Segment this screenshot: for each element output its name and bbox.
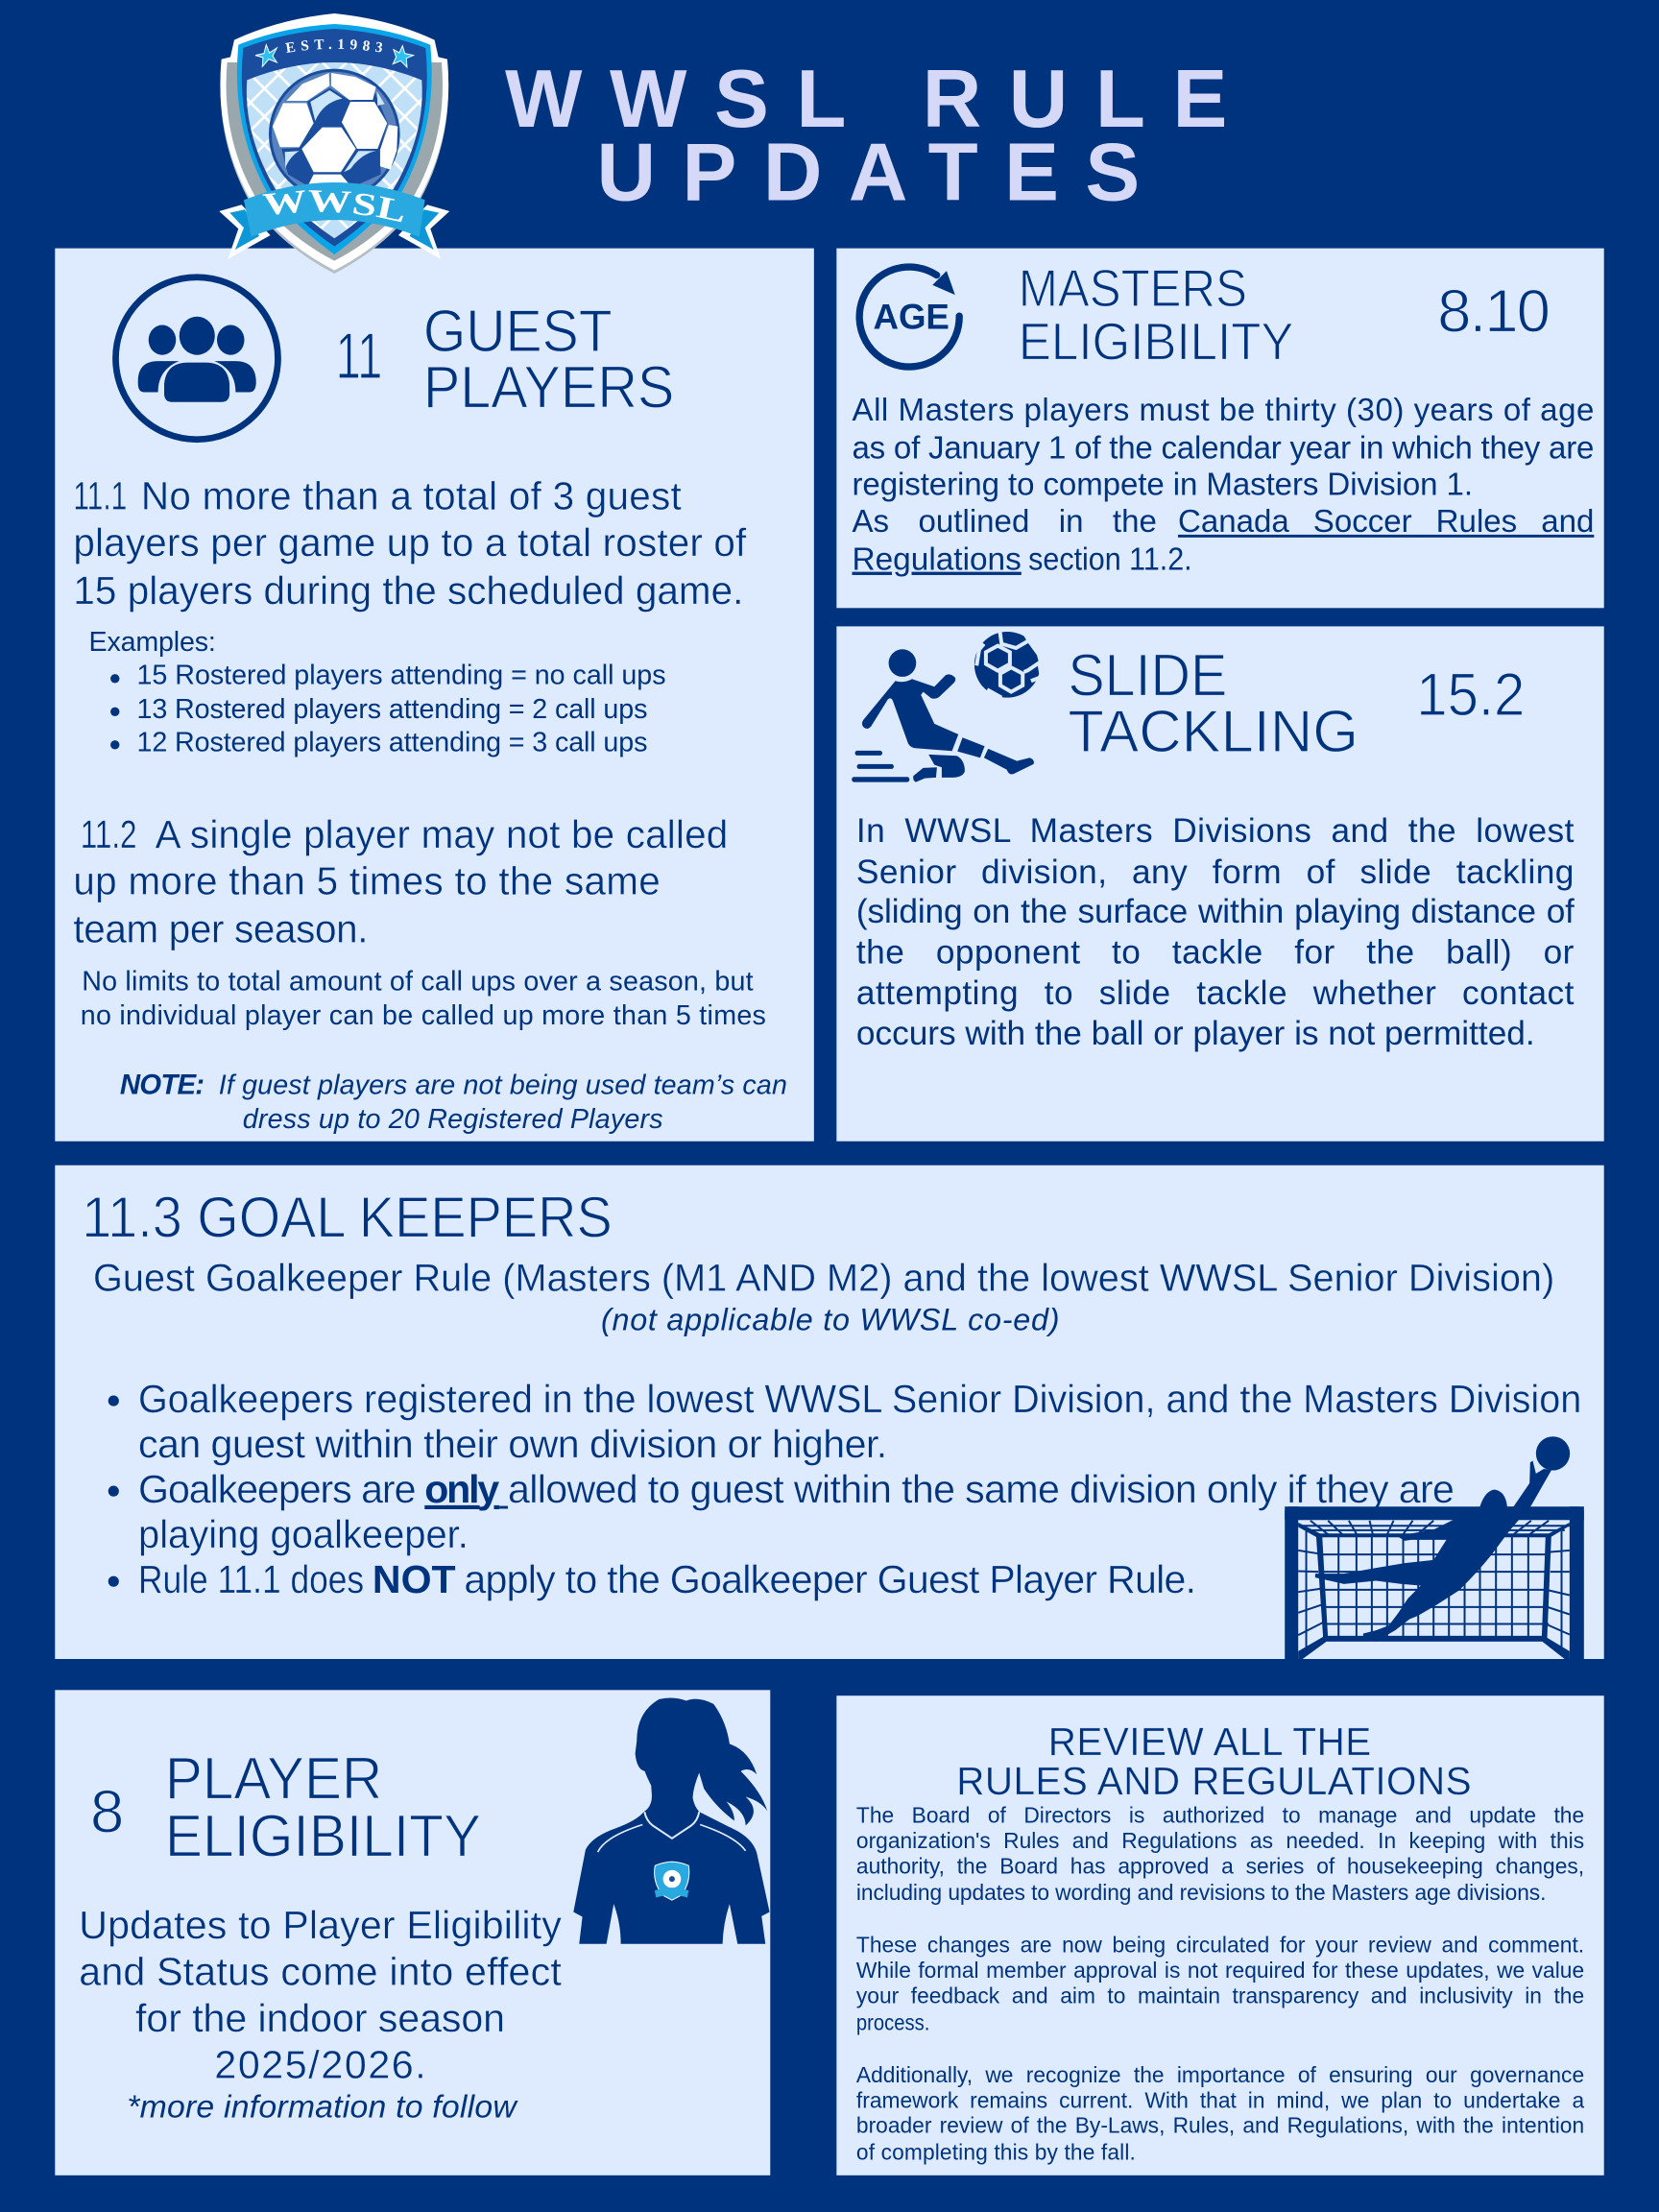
call up limits note: No limits to total amount of call ups over a season, but bbox=[82, 967, 754, 998]
goal keeper bullet list: Rule 11.1 does bbox=[138, 1557, 364, 1601]
player eligibility text bbox=[79, 1903, 562, 2086]
heading: slide tackling bbox=[1068, 642, 1358, 765]
slide tackling text: Senior division, any form of slide tackling bbox=[856, 854, 1575, 892]
paragraph three bbox=[856, 2063, 1584, 2165]
rule 11.2 text: up more than 5 times to the same bbox=[73, 859, 661, 903]
paragraph two: your feedback and aim to maintain transparency and inclusivity in the bbox=[856, 1984, 1584, 2008]
section number 8: 8 bbox=[90, 1779, 124, 1846]
slide tackling text: In WWSL Masters Divisions and the lowest bbox=[856, 812, 1575, 851]
player eligibility text: Updates to Player Eligibility bbox=[79, 1903, 562, 1947]
crest text: established 1983: EST.1983 bbox=[285, 38, 382, 53]
heading: player eligibility: ELIGIBILITY bbox=[165, 1804, 481, 1870]
heading: guest players: GUEST bbox=[423, 299, 613, 365]
masters eligibility text: section 11.2. bbox=[1028, 542, 1192, 578]
italic note bbox=[120, 1070, 787, 1135]
icon: age cycle: AGE bbox=[874, 297, 950, 336]
rule 11.2 text: 11.2 bbox=[81, 812, 137, 856]
crest: ribbon tails bbox=[219, 204, 449, 259]
italic note: NOTE: bbox=[120, 1070, 204, 1101]
italic note: dress up to 20 Registered Players bbox=[243, 1104, 663, 1135]
heading: player eligibility bbox=[165, 1745, 481, 1870]
panel: guest players bbox=[55, 249, 814, 1142]
crest: soccer ball bbox=[269, 69, 400, 200]
heading: masters eligibility: ELIGIBILITY bbox=[1019, 313, 1293, 372]
paragraph one: organization's Rules and Regulations as needed. In keeping with this bbox=[856, 1829, 1584, 1853]
title bbox=[505, 54, 1227, 219]
icon: group of players bbox=[115, 277, 277, 440]
goal keeper bullet list: can guest within their own division or higher. bbox=[138, 1422, 887, 1466]
slide tackling text: (sliding on the surface within playing distance of bbox=[856, 893, 1575, 931]
rule 11.2 text: A single player may not be called bbox=[156, 812, 728, 856]
paragraph three: framework remains current. With that in mind, we plan to undertake a bbox=[856, 2088, 1584, 2112]
paragraph three: of completing this by the fall. bbox=[856, 2140, 1136, 2165]
panel: masters eligibility bbox=[836, 249, 1604, 608]
paragraph one bbox=[856, 1804, 1584, 1905]
masters eligibility text bbox=[853, 393, 1594, 578]
paragraph two: While formal member approval is not required for these updates, we value bbox=[856, 1959, 1584, 1983]
heading: slide tackling: SLIDE bbox=[1068, 642, 1227, 709]
icon: female player silhouette with crest bbox=[573, 1698, 770, 1944]
panel: goal keepers bbox=[55, 1166, 1604, 1659]
heading: review rules bbox=[956, 1719, 1472, 1803]
paragraph two: These changes are now being circulated for your review and comment. bbox=[856, 1934, 1584, 1958]
heading: review rules: REVIEW ALL THE bbox=[1048, 1719, 1371, 1764]
examples list: 13 Rostered players attending = 2 call ups bbox=[137, 694, 647, 725]
heading: masters eligibility: MASTERS bbox=[1019, 259, 1247, 318]
masters eligibility text: Canada Soccer Rules and bbox=[1178, 504, 1594, 539]
paragraph two: process. bbox=[856, 2009, 929, 2034]
icon: goalkeeper diving in goal bbox=[1285, 1436, 1584, 1659]
call up limits note: no individual player can be called up more than 5 times bbox=[81, 1000, 766, 1031]
slide tackling text bbox=[856, 812, 1575, 1052]
goal keeper bullet list: apply to the Goalkeeper Guest Player Rule. bbox=[464, 1557, 1196, 1601]
heading: slide tackling: TACKLING bbox=[1068, 699, 1358, 765]
examples list: 12 Rostered players attending = 3 call ups bbox=[137, 727, 647, 757]
rule 11.1 text: 11.1 bbox=[73, 473, 127, 517]
rule 11.1 text: players per game up to a total roster of bbox=[73, 520, 747, 565]
goal keeper bullet list: Goalkeepers registered in the lowest WWSL Senior Division, and the Masters Division bbox=[138, 1377, 1581, 1421]
slide tackling text: occurs with the ball or player is not permitted. bbox=[856, 1015, 1535, 1052]
goal keeper bullet list: allowed to guest within the same division only if they are bbox=[508, 1467, 1455, 1511]
heading: review rules: RULES AND REGULATIONS bbox=[956, 1759, 1472, 1803]
rule 11.1 text: No more than a total of 3 guest bbox=[141, 473, 682, 517]
title: WWSL RULE bbox=[505, 54, 1227, 145]
paragraph one: including updates to wording and revisions to the Masters age divisions. bbox=[856, 1880, 1546, 1905]
player eligibility text: and Status come into effect bbox=[79, 1949, 562, 1993]
masters eligibility text: All Masters players must be thirty (30) years of age bbox=[853, 393, 1594, 428]
slide tackling text: attempting to slide tackle whether contact bbox=[856, 974, 1575, 1013]
subheading: Guest Goalkeeper Rule (Masters (M1 AND M2) and the lowest WWSL Senior Division) bbox=[93, 1257, 1554, 1299]
applicability note: (not applicable to WWSL co-ed) bbox=[601, 1303, 1060, 1337]
panel: review all the rules bbox=[836, 1695, 1604, 2176]
masters eligibility text: As outlined in the bbox=[853, 504, 1157, 539]
panel: slide tackling bbox=[836, 626, 1604, 1142]
panel: player eligibility bbox=[55, 1690, 770, 2176]
logo: WWSL crest bbox=[219, 13, 449, 274]
title: UPDATES bbox=[597, 128, 1140, 219]
section number 15.2: 15.2 bbox=[1416, 661, 1525, 729]
section number 11: 11 bbox=[336, 321, 382, 393]
masters eligibility text: Regulations bbox=[853, 542, 1022, 578]
more information note: *more information to follow bbox=[127, 2089, 518, 2126]
slide tackling text: the opponent to tackle for the ball) or bbox=[856, 934, 1575, 972]
crest text: WWSL: WWSL bbox=[262, 190, 403, 223]
heading: masters eligibility bbox=[1019, 259, 1293, 372]
heading: guest players: PLAYERS bbox=[423, 355, 674, 421]
rule 11.1 text bbox=[73, 473, 747, 613]
examples list bbox=[89, 627, 666, 757]
player eligibility text: for the indoor season bbox=[135, 1996, 505, 2040]
paragraph one: authority, the Board has approved a series of housekeeping changes, bbox=[856, 1855, 1584, 1879]
heading: player eligibility: PLAYER bbox=[165, 1745, 382, 1812]
goal keeper bullet list: playing goalkeeper. bbox=[138, 1512, 469, 1556]
goal keeper bullet list bbox=[108, 1377, 1581, 1601]
goal keeper bullet list: NOT bbox=[373, 1557, 456, 1601]
goal keeper bullet list: only bbox=[424, 1467, 499, 1511]
goal keeper bullet list: Goalkeepers are bbox=[138, 1467, 416, 1511]
italic note: If guest players are not being used team’s can bbox=[219, 1070, 787, 1101]
section number 8.10: 8.10 bbox=[1437, 277, 1551, 345]
call up limits note bbox=[81, 967, 766, 1031]
paragraph three: Additionally, we recognize the importance of ensuring our governance bbox=[856, 2063, 1584, 2087]
masters eligibility text: as of January 1 of the calendar year in which they are bbox=[853, 431, 1594, 467]
rule 11.2 text: team per season. bbox=[73, 907, 369, 951]
paragraph two bbox=[856, 1934, 1584, 2034]
icon: sliding player and ball bbox=[852, 632, 1042, 782]
paragraph one: The Board of Directors is authorized to manage and update the bbox=[856, 1804, 1584, 1828]
examples list: Examples: bbox=[89, 627, 216, 658]
icon: age cycle bbox=[859, 267, 959, 367]
rule 11.1 text: 15 players during the scheduled game. bbox=[73, 568, 743, 613]
player eligibility text: 2025/2026. bbox=[214, 2042, 426, 2086]
heading: guest players bbox=[423, 299, 674, 421]
masters eligibility text: registering to compete in Masters Division 1. bbox=[853, 468, 1473, 503]
examples list: 15 Rostered players attending = no call ups bbox=[137, 661, 666, 691]
paragraph three: broader review of the By-Laws, Rules, and Regulations, with the intention bbox=[856, 2114, 1584, 2138]
heading: goal keepers: 11.3 GOAL KEEPERS bbox=[82, 1185, 613, 1250]
rule 11.2 text bbox=[73, 812, 728, 951]
